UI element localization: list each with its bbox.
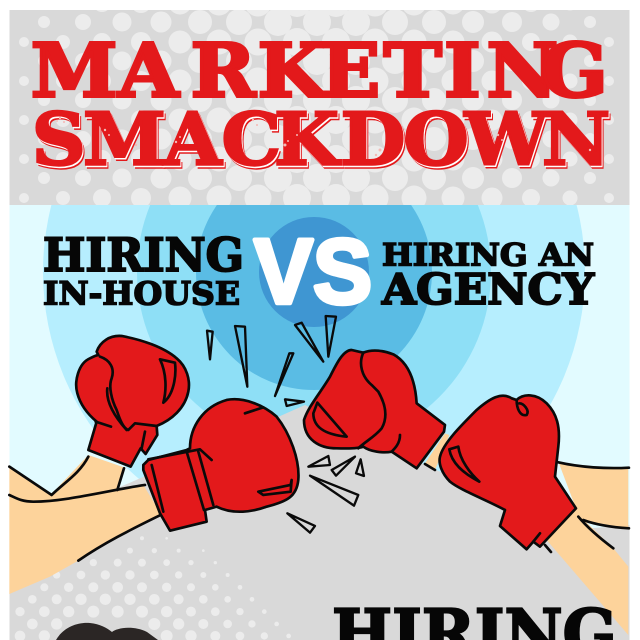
heading: VS: VS [254,221,372,323]
heading: hiring in-house: HIRING [43,228,244,282]
speckles on title [56,117,591,156]
glove: lower right [440,395,576,549]
glove: upper left [76,336,189,467]
grey hill with halftone dots [9,405,630,640]
title: SMACKDOWN: SMACKDOWN [32,98,610,182]
title: SMACKDOWN: SMACKDOWN [34,101,612,185]
glove: lower left [143,399,298,531]
heading: hiring an agency: HIRING AN [382,238,594,274]
left arms [9,455,162,594]
glove: upper right [304,350,445,468]
title: SMACKDOWN: SMACKDOWN [33,99,611,184]
title: MARKETING: MARKETING [31,27,608,114]
impact shards [207,316,364,533]
portrait: top of hair [56,623,158,640]
heading: hiring an agency [381,238,595,314]
banner: dotted grey title background [10,0,630,212]
panel: concentric blue target background [10,205,630,528]
right arms [425,433,629,635]
heading: hiring in-house: IN-HOUSE [43,274,240,312]
heading: hiring an agency: AGENCY [381,265,595,314]
heading: hiring in-house [43,228,244,312]
